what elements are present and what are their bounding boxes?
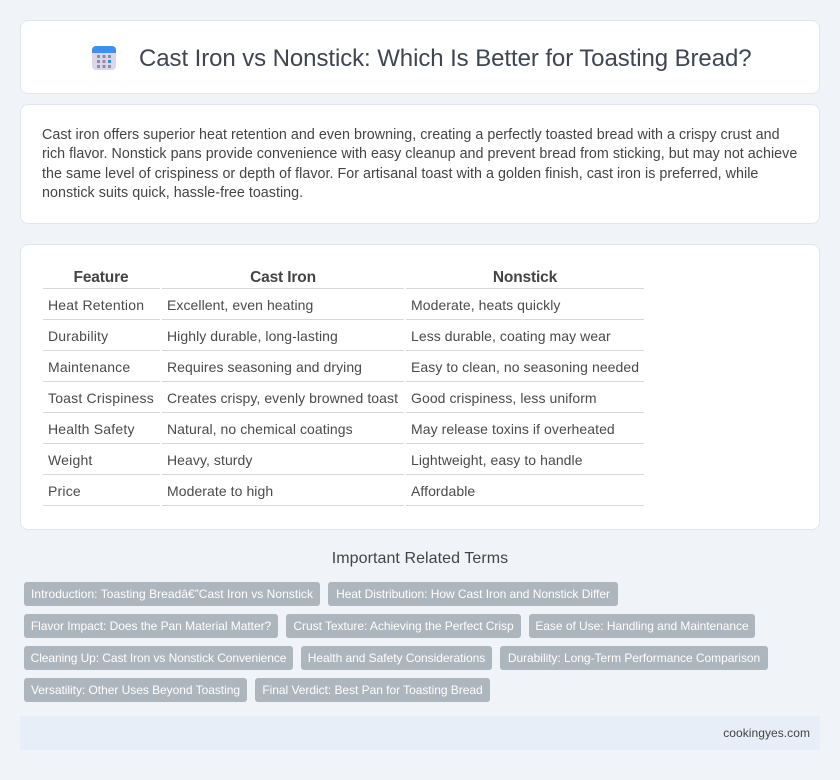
intro paragraph: nonstick suits quick, hassle-free toasting.	[42, 185, 303, 201]
related terms tags: Final Verdict: Best Pan for Toasting Bread	[262, 683, 483, 697]
icon: calendar	[92, 46, 116, 70]
comparison table: Heat Retention	[48, 297, 144, 313]
comparison table: Natural, no chemical coatings	[167, 421, 353, 437]
comparison table: Requires seasoning and drying	[167, 359, 362, 375]
intro paragraph	[42, 127, 797, 201]
related terms tags: Versatility: Other Uses Beyond Toasting	[31, 683, 240, 697]
related terms tags: Ease of Use: Handling and Maintenance	[535, 619, 749, 633]
comparison table: Moderate to high	[167, 483, 273, 499]
comparison table: Lightweight, easy to handle	[411, 452, 583, 468]
intro paragraph: Cast iron offers superior heat retention and even browning, creating a perfectly toasted bread with a crispy crust and	[42, 127, 780, 143]
comparison table: Feature	[74, 269, 128, 286]
title: Cast Iron vs Nonstick: Which Is Better for Toasting Bread?	[139, 45, 752, 72]
related terms heading: Important Related Terms	[332, 550, 508, 567]
related terms tags	[24, 582, 768, 702]
intro paragraph: rich flavor. Nonstick pans provide convenience with easy cleanup and prevent bread from sticking, but may not achieve	[42, 146, 797, 162]
comparison table: Toast Crispiness	[48, 390, 154, 406]
comparison table: Creates crispy, evenly browned toast	[167, 390, 398, 406]
comparison table: Price	[48, 483, 81, 499]
comparison table: Excellent, even heating	[167, 297, 313, 313]
comparison table: Weight	[48, 452, 93, 468]
comparison table: Durability	[48, 328, 108, 344]
intro paragraph: the same level of crispiness or depth of flavor. For artisanal toast with a golden finish, cast iron is preferred, while	[42, 166, 758, 182]
comparison table: Easy to clean, no seasoning needed	[411, 359, 639, 375]
related terms tags: Crust Texture: Achieving the Perfect Crisp	[293, 619, 514, 633]
comparison table: Affordable	[411, 483, 475, 499]
related terms tags: Health and Safety Considerations	[308, 651, 485, 665]
comparison table: May release toxins if overheated	[411, 421, 615, 437]
related terms tags: Heat Distribution: How Cast Iron and Nonstick Differ	[336, 587, 610, 601]
comparison table: Heavy, sturdy	[167, 452, 252, 468]
comparison table: Health Safety	[48, 421, 135, 437]
related terms tags: Introduction: Toasting Breadâ€”Cast Iron vs Nonstick	[31, 587, 313, 601]
comparison table	[43, 269, 644, 506]
header panel	[20, 20, 820, 94]
comparison table panel	[20, 244, 820, 530]
footer bar	[20, 716, 820, 750]
comparison table: Nonstick	[493, 269, 557, 286]
related terms tags: Cleaning Up: Cast Iron vs Nonstick Convenience	[31, 651, 286, 665]
comparison table: Good crispiness, less uniform	[411, 390, 597, 406]
comparison table: Cast Iron	[250, 269, 316, 286]
comparison table: Moderate, heats quickly	[411, 297, 560, 313]
intro text panel	[20, 104, 820, 224]
comparison table: Less durable, coating may wear	[411, 328, 611, 344]
footer source text: cookingyes.com	[723, 726, 810, 740]
comparison table: Maintenance	[48, 359, 130, 375]
comparison table: Highly durable, long-lasting	[167, 328, 338, 344]
related terms tags: Flavor Impact: Does the Pan Material Matter?	[31, 619, 271, 633]
related terms tags: Durability: Long-Term Performance Comparison	[508, 651, 760, 665]
